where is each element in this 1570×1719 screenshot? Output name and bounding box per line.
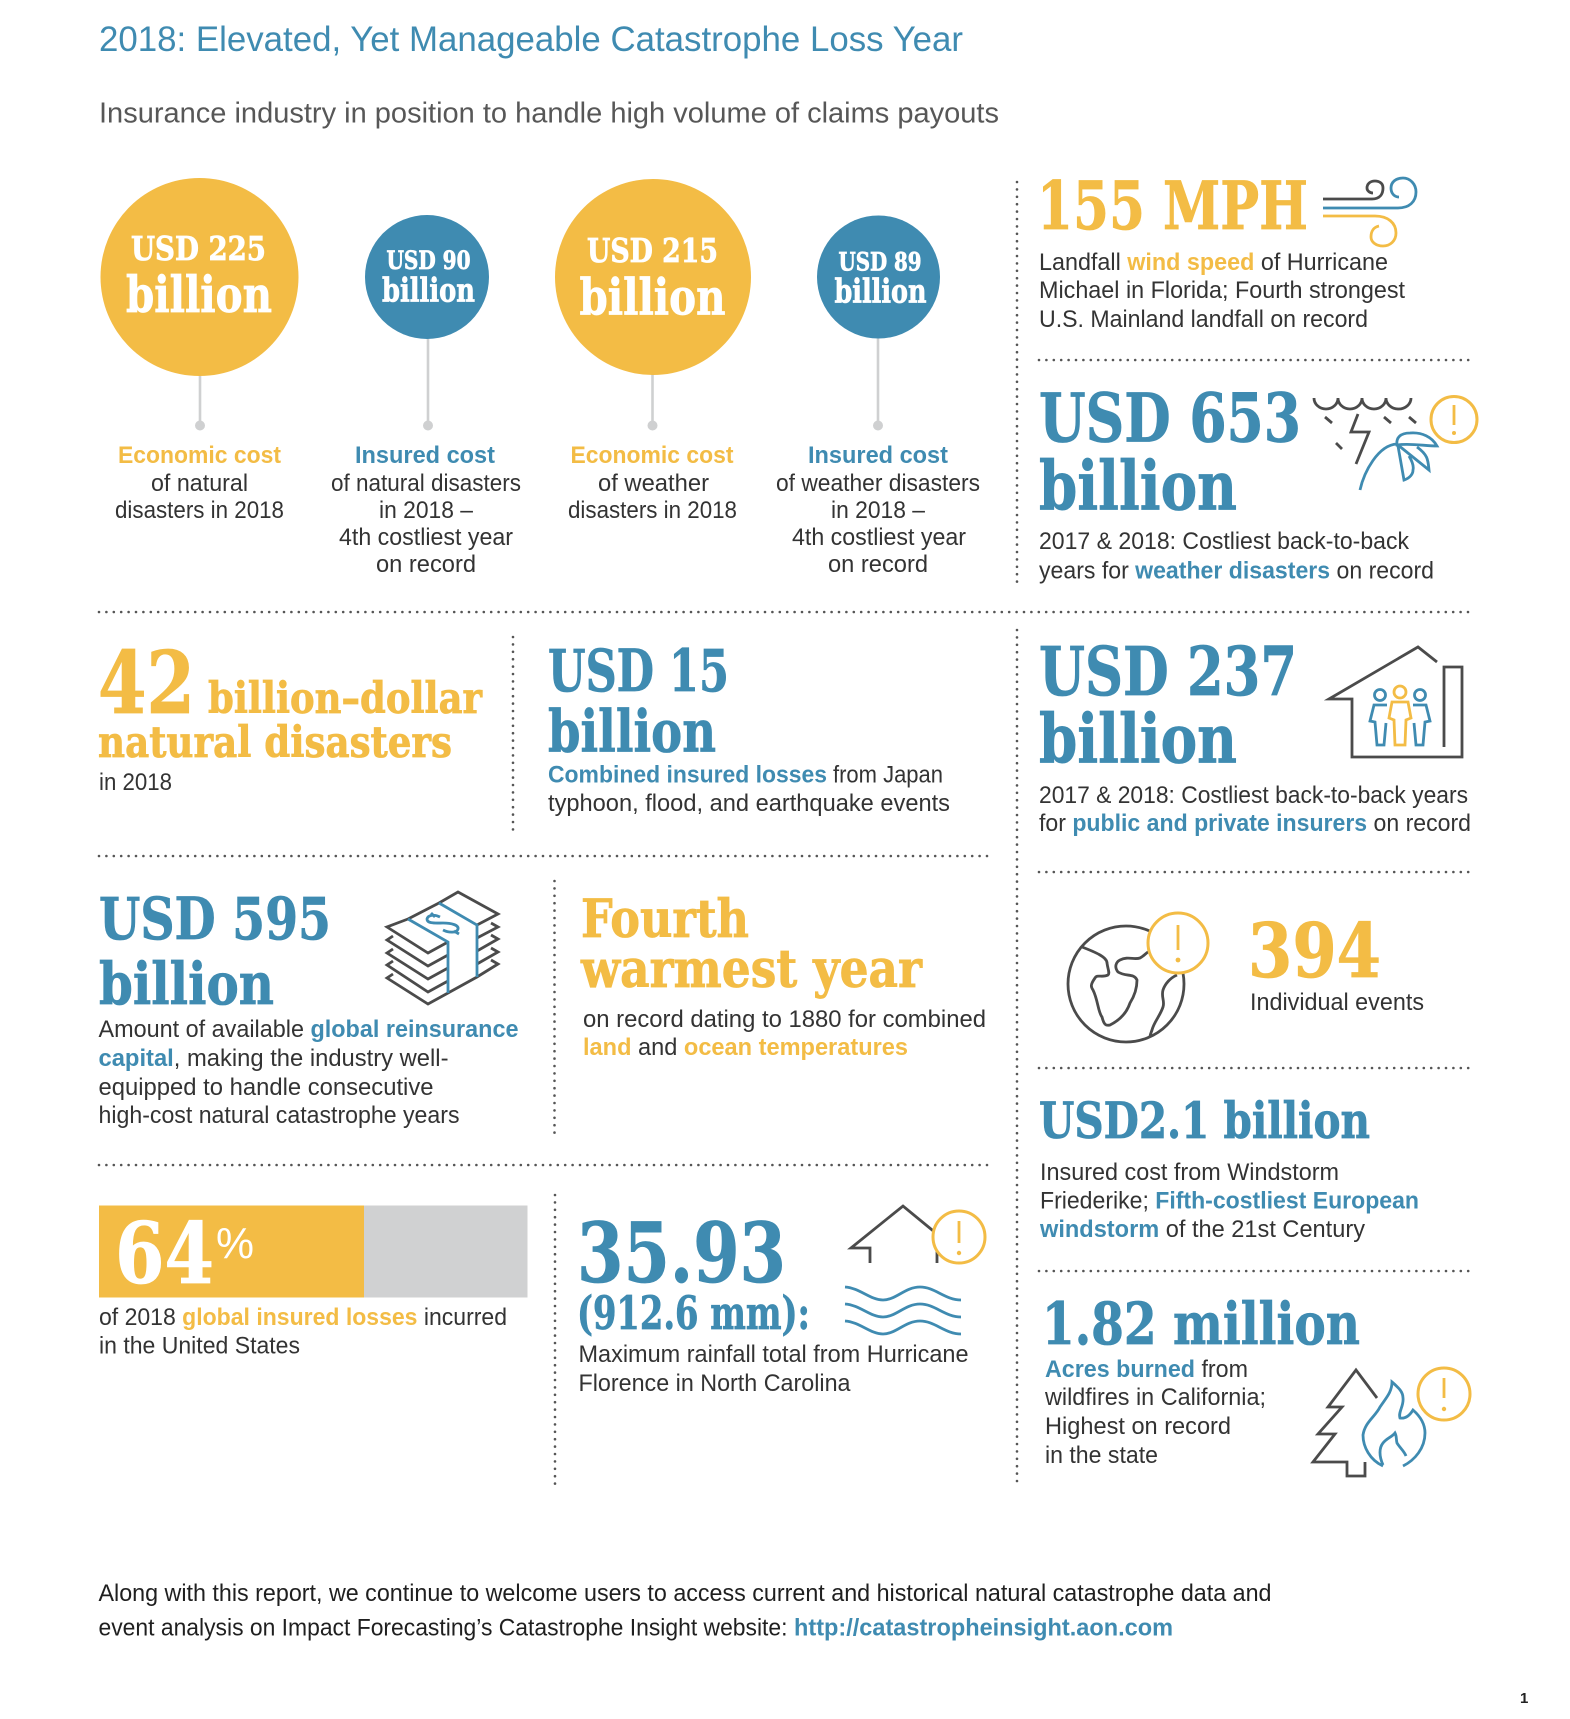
panel: USD 15 billion: USD 15: [548, 637, 729, 705]
circle: insured cost natural disasters: USD 90: [386, 246, 470, 275]
panel: 155 MPH: U.S. Mainland landfall on record: [1039, 306, 1368, 333]
panel: USD 15 billion: Combined insured losses: [548, 762, 827, 788]
panel: USD 595 billion: equipped to handle consecutive: [98, 1074, 434, 1101]
circle: insured cost weather disasters: in 2018 –: [831, 497, 926, 524]
circle: insured cost weather disasters: Insured cost: [808, 442, 948, 469]
footer note: http://catastropheinsight.aon.com: [794, 1614, 1173, 1642]
panel: 35.93 rainfall: (912.6 mm):: [577, 1286, 810, 1340]
panel: cost circles: [100, 178, 980, 578]
circle: insured cost weather disasters: billion: [834, 272, 926, 310]
panel: 1.82 million acres: 1.82 million: [1042, 1290, 1360, 1358]
title: 2018: Elevated, Yet Manageable Catastrophe Loss Year: [99, 20, 963, 59]
panel: USD 237 billion: billion: [1039, 700, 1237, 778]
panel: 64 percent bar: [99, 1204, 528, 1360]
panel: USD 595 billion: [98, 885, 518, 1129]
circle: insured cost natural disasters: in 2018 –: [379, 497, 474, 524]
circle: insured cost weather disasters: of weather disasters: [776, 470, 980, 497]
panel: USD 653 billion: 2017 & 2018: Costliest back-to-back: [1039, 528, 1410, 555]
footer note: [98, 1580, 1272, 1642]
panel: 35.93 rainfall: Maximum rainfall total from Hurricane: [578, 1341, 968, 1368]
icon: flooded house: [845, 1206, 985, 1334]
panel: 1.82 million acres: wildfires in California;: [1044, 1384, 1266, 1411]
footer note: Along with this report, we continue to welcome users to access current and historical natural catastrophe data and: [98, 1580, 1272, 1607]
panel: USD 595 billion: capital, making the industry well-: [98, 1045, 448, 1072]
bar chart: 64 percent share: 64: [115, 1204, 214, 1303]
panel: 35.93 rainfall: 35.93: [577, 1206, 786, 1302]
icon: burning tree: [1313, 1368, 1470, 1476]
panel: 64 percent bar: in the United States: [99, 1332, 300, 1360]
panel: USD 237 billion: USD 237: [1039, 632, 1297, 711]
footer note: event analysis on Impact Forecasting’s Catastrophe Insight website:: [98, 1614, 788, 1642]
panel: 35.93 rainfall: [577, 1206, 985, 1397]
panel: USD 15 billion: from Japan: [833, 762, 943, 788]
icon: stack of money: [387, 892, 498, 1004]
panel: 1.82 million acres: in the state: [1045, 1442, 1158, 1469]
circle: insured cost weather disasters: [776, 216, 980, 578]
circle: economic cost natural disasters: of natural: [151, 470, 248, 497]
panel: USD 237 billion: 2017 & 2018: Costliest back-to-back years: [1039, 782, 1468, 809]
panel: 64 percent bar: of 2018 global insured losses incurred: [99, 1304, 507, 1331]
panel: 394 individual events: [1068, 907, 1424, 1042]
circle: insured cost natural disasters: on record: [376, 551, 476, 578]
panel: USD2.1 billion: Insured cost from Windstorm: [1040, 1159, 1339, 1186]
circle: insured cost weather disasters: USD 89: [838, 248, 922, 276]
circle: economic cost natural disasters: billion: [126, 265, 272, 324]
panel: 42 billion-dollar natural disasters: in 2018: [99, 769, 172, 796]
panel: USD 653 billion: billion: [1039, 446, 1237, 526]
circle: economic cost weather disasters: of weather: [598, 470, 709, 497]
circle: economic cost weather disasters: [555, 179, 751, 524]
panel: fourth warmest year: land and ocean temperatures: [583, 1034, 908, 1061]
icon: storm and palm: [1314, 396, 1477, 490]
panel: USD 15 billion: typhoon, flood, and earthquake events: [548, 790, 950, 817]
bar chart: 64 percent share: %: [216, 1219, 254, 1268]
panel: USD 653 billion: years for weather disasters on record: [1039, 558, 1434, 584]
panel: USD2.1 billion: windstorm of the 21st Century: [1039, 1216, 1365, 1243]
panel: USD 653 billion: USD 653: [1039, 378, 1301, 458]
panel: 1.82 million acres: [1042, 1290, 1470, 1476]
panel: 42 billion-dollar natural disasters: [98, 633, 483, 796]
panel: USD 15 billion: [548, 637, 950, 817]
panel: fourth warmest year: on record dating to 1880 for combined: [583, 1006, 986, 1033]
circle: insured cost natural disasters: billion: [382, 270, 475, 310]
panel: USD 595 billion: high-cost natural catastrophe years: [98, 1102, 460, 1129]
panel: 155 MPH: Landfall wind speed of Hurricane: [1039, 249, 1388, 276]
panel: 155 MPH: [1037, 167, 1416, 333]
panel: USD 237 billion: for public and private insurers on record: [1039, 810, 1471, 837]
panel: USD 595 billion: Amount of available global reinsurance: [98, 1016, 518, 1043]
circle: economic cost weather disasters: disasters in 2018: [568, 497, 737, 524]
icon: wind: [1323, 178, 1416, 246]
panel: USD 653 billion: [1039, 378, 1477, 584]
panel: USD 595 billion: billion: [99, 950, 274, 1018]
panel: USD2.1 billion: USD2.1 billion: [1039, 1091, 1370, 1150]
circle: insured cost natural disasters: Insured cost: [355, 442, 495, 469]
panel: 394 individual events: Individual events: [1250, 989, 1424, 1016]
circle: economic cost weather disasters: USD 215: [587, 231, 718, 270]
circle: economic cost weather disasters: billion: [580, 268, 726, 326]
circle: economic cost weather disasters: Economic cost: [570, 442, 734, 469]
panel: 155 MPH: 155 MPH: [1037, 167, 1308, 245]
icon: globe with alert: [1068, 913, 1208, 1042]
circle: insured cost weather disasters: 4th costliest year: [792, 524, 966, 551]
circle: insured cost natural disasters: of natural disasters: [331, 470, 521, 497]
panel: USD2.1 billion: Friederike; Fifth-costliest European: [1040, 1188, 1419, 1214]
panel: 35.93 rainfall: Florence in North Carolina: [578, 1370, 851, 1397]
circle: insured cost weather disasters: on record: [828, 551, 928, 578]
panel: fourth warmest year: [580, 889, 986, 1061]
subtitle: Insurance industry in position to handle high volume of claims payouts: [99, 98, 999, 130]
bar chart: 64 percent share: [99, 1204, 528, 1303]
panel: fourth warmest year: warmest year: [580, 939, 923, 1000]
panel: 1.82 million acres: Highest on record: [1045, 1413, 1231, 1440]
panel: USD 595 billion: USD 595: [99, 885, 331, 953]
circle: economic cost natural disasters: disasters in 2018: [115, 497, 284, 524]
panel: 1.82 million acres: Acres burned from: [1045, 1356, 1248, 1383]
panel: 42 billion-dollar natural disasters: natural disasters: [98, 718, 452, 768]
panel: 155 MPH: Michael in Florida; Fourth strongest: [1039, 277, 1405, 304]
circle: insured cost natural disasters: [331, 215, 521, 578]
panel: 394 individual events: 394: [1248, 907, 1381, 995]
panel: USD 15 billion: billion: [548, 698, 716, 766]
circle: economic cost natural disasters: [100, 178, 298, 524]
panel: 42 billion-dollar natural disasters: billion–dollar: [208, 674, 483, 724]
panel: USD 237 billion: [1039, 632, 1471, 837]
panel: fourth warmest year: Fourth: [581, 889, 749, 950]
panel: 42 billion-dollar natural disasters: 42: [98, 633, 195, 734]
page number: 1: [1520, 1690, 1528, 1707]
circle: insured cost natural disasters: 4th costliest year: [339, 524, 513, 551]
circle: economic cost natural disasters: USD 225: [131, 229, 266, 268]
circle: economic cost natural disasters: Economic cost: [118, 442, 281, 469]
panel: USD2.1 billion: [1039, 1091, 1419, 1243]
icon: house with family: [1329, 647, 1462, 757]
